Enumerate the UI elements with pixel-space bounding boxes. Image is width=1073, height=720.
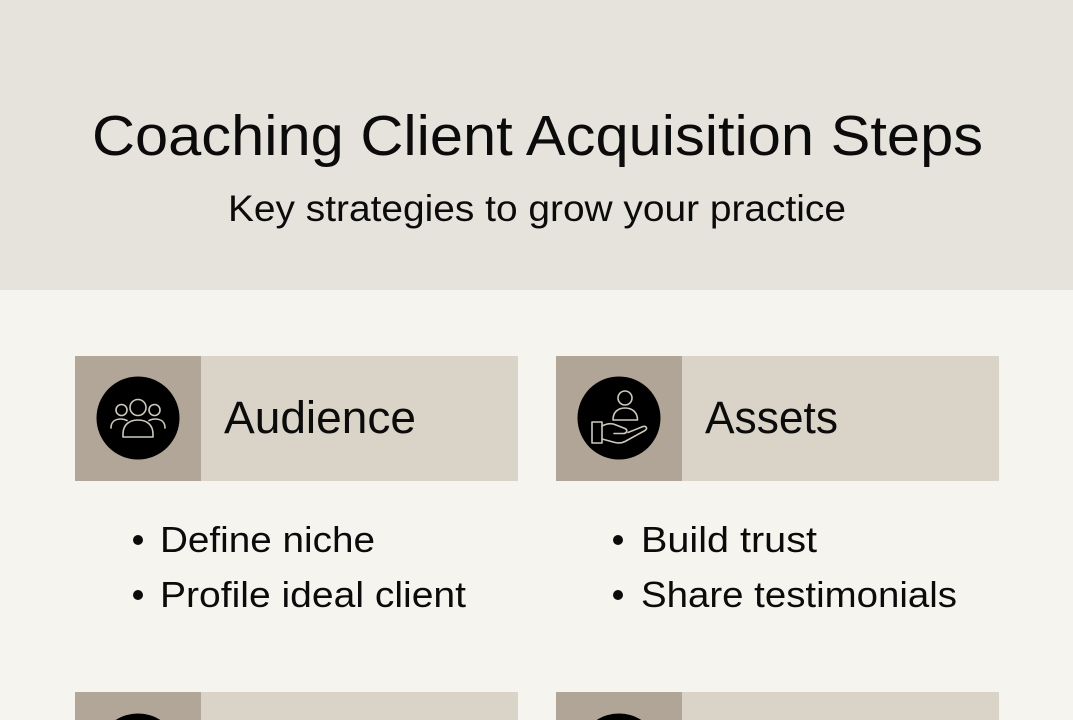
icon: hand holding person bbox=[578, 376, 660, 460]
heading: assets: Assets bbox=[705, 392, 838, 443]
icon tile bbox=[556, 356, 682, 481]
panel: fourth step, cropped bbox=[556, 692, 999, 720]
panel: assets bbox=[556, 356, 999, 615]
subtitle: Key strategies to grow your practice bbox=[228, 188, 846, 229]
panel: third step, cropped bbox=[75, 692, 518, 720]
bullet list bbox=[613, 519, 957, 615]
title: Coaching Client Acquisition Steps bbox=[92, 104, 983, 168]
icon: group of people bbox=[96, 376, 180, 460]
icon tile bbox=[75, 356, 201, 481]
bullet list: Share testimonials bbox=[641, 574, 957, 615]
heading bar bbox=[75, 356, 518, 481]
bullet list bbox=[133, 519, 466, 615]
heading: audience: Audience bbox=[224, 392, 416, 443]
heading bar bbox=[556, 356, 999, 481]
bullet list: Profile ideal client bbox=[160, 574, 466, 615]
header band bbox=[0, 0, 1073, 290]
bullet list: Build trust bbox=[641, 519, 817, 560]
bullet list: Define niche bbox=[160, 519, 375, 560]
panel: audience bbox=[75, 356, 518, 615]
